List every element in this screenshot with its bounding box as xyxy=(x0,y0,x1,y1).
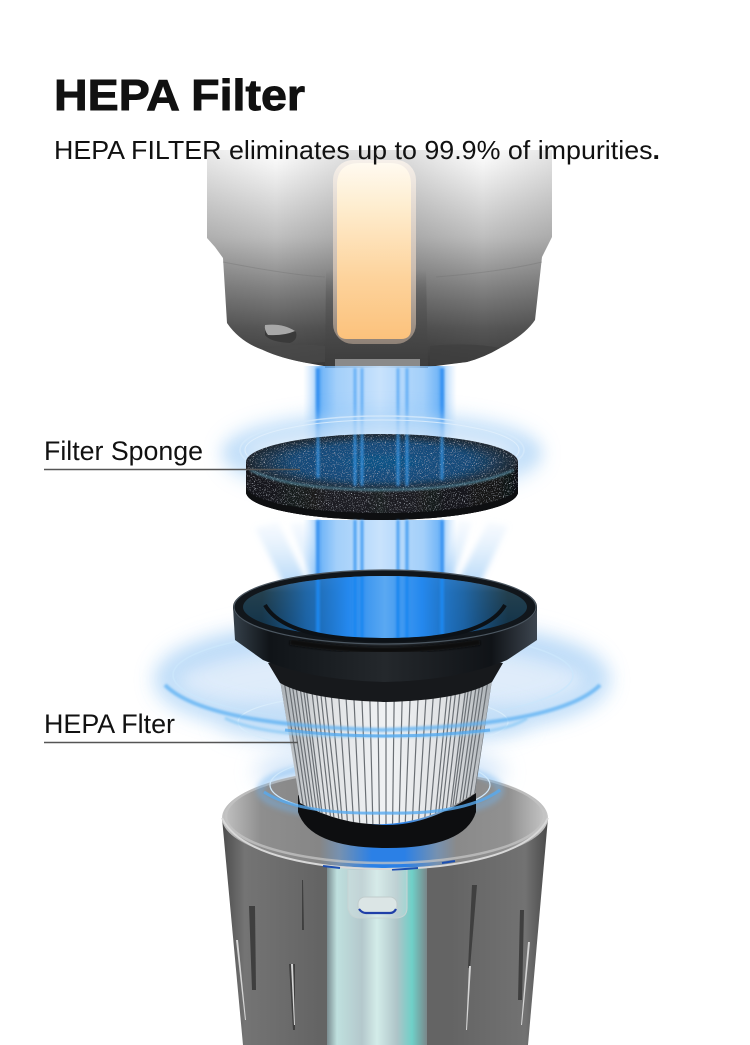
upper airflow beams xyxy=(303,366,457,446)
big airflow rings behind filter xyxy=(164,623,600,802)
title: HEPA Filter xyxy=(54,71,305,120)
vacuum motor head xyxy=(207,150,552,368)
lower small ring xyxy=(260,755,500,818)
bottom black band xyxy=(298,793,476,848)
filter sponge xyxy=(246,430,518,520)
dust canister xyxy=(222,768,548,1045)
center metal strip xyxy=(327,860,427,1045)
lower airflow beams and fan xyxy=(255,520,508,610)
subtitle: HEPA FILTER eliminates up to 99.9% of impurities . xyxy=(54,135,660,165)
HEPA filter cartridge xyxy=(233,560,537,848)
release button xyxy=(348,870,407,918)
glowing window xyxy=(333,160,416,344)
vent slits xyxy=(249,880,524,1030)
pleated media xyxy=(280,682,492,824)
blue flow in cup xyxy=(266,576,504,638)
label: HEPA filter: HEPA Flter xyxy=(44,709,175,739)
sponge airflow halo xyxy=(222,416,542,486)
front airflow arcs xyxy=(165,685,600,813)
side button xyxy=(265,325,296,343)
outer rim xyxy=(233,607,537,682)
label: filter sponge: Filter Sponge xyxy=(44,436,203,466)
lower collar xyxy=(268,655,503,702)
